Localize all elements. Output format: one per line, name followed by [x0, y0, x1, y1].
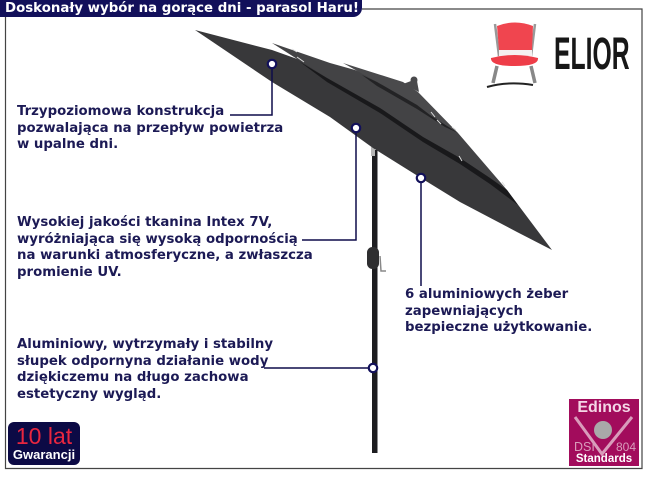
- text: construction: [17, 104, 283, 152]
- logo wordmark: ELIOR: [554, 28, 630, 79]
- text: construction: pozwalająca na przepływ powietrza: [17, 120, 283, 136]
- text: construction: Trzypoziomowa konstrukcja: [17, 104, 224, 119]
- pole top collar: [371, 147, 375, 156]
- text: ribs: zapewniających: [405, 304, 523, 318]
- text: fabric: wyróżniająca się wysoką odpornością: [17, 232, 298, 246]
- leader: pole: [264, 367, 373, 369]
- badge: Edinos standards: [569, 399, 639, 466]
- icon: red chair: [486, 22, 538, 88]
- badge label: Gwarancji: [13, 447, 75, 462]
- tier shadow: [300, 62, 518, 205]
- text: fabric: Wysokiej jakości tkanina Intex 7V,: [17, 215, 272, 230]
- text: ribs: bezpieczne użytkowanie.: [405, 320, 592, 335]
- middle canopy tier: [272, 43, 507, 190]
- text: pole: Aluminiowy, wytrzymały i stabilny: [17, 337, 273, 352]
- rib highlights: [292, 49, 505, 186]
- badge code left: DSI: [574, 440, 595, 454]
- logo: Elior: [486, 22, 630, 88]
- text: pole: [17, 337, 273, 402]
- top tier shadow: [362, 75, 458, 133]
- canopy finial: [403, 76, 419, 92]
- text: pole: dziękiczemu na długo zachowa: [17, 370, 249, 385]
- text: ribs: [405, 287, 592, 335]
- top canopy tier: [343, 63, 458, 133]
- badge heading: Edinos: [577, 399, 631, 416]
- badge footer: Standards: [576, 453, 632, 465]
- text: fabric: promienie UV.: [17, 264, 122, 280]
- text: fabric: na warunki atmosferyczne, a zwłaszcza: [17, 248, 313, 263]
- marker: construction: [268, 60, 276, 68]
- text: pole: estetyczny wygląd.: [17, 386, 161, 402]
- tilt crank housing: [367, 247, 386, 271]
- lower canopy tier: [195, 30, 552, 250]
- text: pole: słupek odpornyna działanie wody: [17, 354, 268, 368]
- marker: pole: [369, 364, 377, 372]
- pole: [372, 150, 378, 453]
- badge: 10 lat warranty: [8, 422, 80, 465]
- leader: construction: [230, 64, 272, 115]
- marker: fabric: [352, 124, 360, 132]
- marker: ribs: [417, 174, 425, 182]
- text: construction: w upalne dni.: [17, 137, 118, 152]
- leader: ribs: [420, 178, 422, 286]
- badge number: 10 lat: [16, 423, 72, 449]
- text: fabric: [17, 215, 313, 280]
- badge code right: 804: [616, 440, 636, 454]
- text: ribs: 6 aluminiowych żeber: [405, 287, 568, 302]
- title bar: Doskonały wybór na gorące dni - parasol Haru!: [5, 1, 359, 16]
- leader: fabric: [302, 128, 356, 240]
